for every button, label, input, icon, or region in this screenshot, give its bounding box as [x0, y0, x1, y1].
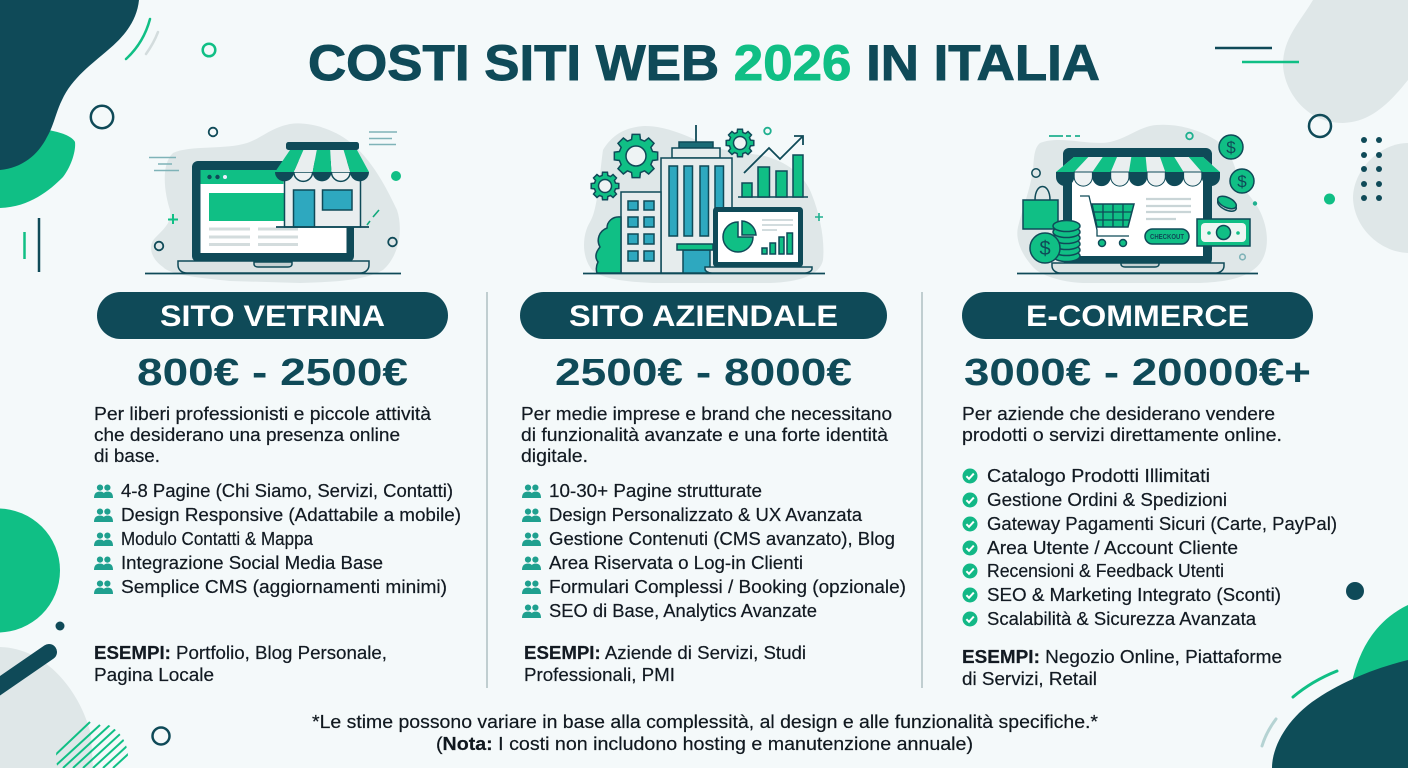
- price: 800€ - 2500€: [137, 352, 408, 394]
- illustration: office buildings and charts: [583, 125, 825, 283]
- examples: Professionali, PMI: [524, 665, 675, 685]
- examples: Pagina Locale: [94, 665, 214, 685]
- examples: [94, 643, 387, 685]
- heading pill: [962, 292, 1313, 339]
- feature list: Recensioni & Feedback Utenti: [987, 561, 1224, 581]
- illustration: online shop laptop: $: [1237, 172, 1247, 191]
- price: 3000€ - 20000€+: [964, 352, 1311, 394]
- description: di funzionalità avanzate e una forte identità: [521, 425, 889, 445]
- feature list: Gestione Contenuti (CMS avanzato), Blog: [549, 529, 895, 549]
- feature list: [962, 466, 1337, 629]
- feature list: SEO di Base, Analytics Avanzate: [549, 601, 817, 621]
- feature list: 10-30+ Pagine strutturate: [549, 481, 762, 501]
- feature list: Formulari Complessi / Booking (opzionale): [549, 577, 906, 597]
- description: [94, 404, 432, 466]
- feature list: Catalogo Prodotti Illimitati: [987, 466, 1210, 486]
- feature list: Modulo Contatti & Mappa: [121, 529, 314, 549]
- illustration: online shop laptop: $: [1226, 138, 1236, 157]
- heading pill: SITO VETRINA: [160, 300, 385, 333]
- panel: sito vetrina: [94, 123, 461, 685]
- examples: ESEMPI: Aziende di Servizi, Studi: [524, 643, 806, 663]
- feature list: Integrazione Social Media Base: [121, 553, 383, 573]
- heading pill: SITO AZIENDALE: [569, 300, 838, 333]
- illustration: online shop laptop: [1017, 125, 1267, 283]
- decoration: top-left shapes: [0, 0, 215, 272]
- illustration: laptop and shop: [145, 123, 401, 283]
- description: Per medie imprese e brand che necessitano: [521, 404, 892, 424]
- examples: ESEMPI: Portfolio, Blog Personale,: [94, 643, 387, 663]
- title: COSTI SITI WEB 2026 IN ITALIA: [308, 35, 1100, 91]
- description: Per liberi professionisti e piccole attività: [94, 404, 432, 424]
- feature list: SEO & Marketing Integrato (Sconti): [987, 585, 1281, 605]
- feature list: 4-8 Pagine (Chi Siamo, Servizi, Contatti): [121, 481, 453, 501]
- decoration: top-right shapes: [1215, 0, 1408, 253]
- heading pill: [97, 292, 448, 339]
- feature list: Area Riservata o Log-in Clienti: [549, 553, 803, 573]
- description: digitale.: [521, 446, 588, 466]
- panel: sito aziendale: [520, 125, 906, 685]
- feature list: Design Responsive (Adattabile a mobile): [121, 505, 461, 525]
- heading pill: E-COMMERCE: [1026, 300, 1249, 333]
- examples: [962, 647, 1282, 689]
- description: prodotti o servizi direttamente online.: [962, 425, 1282, 445]
- illustration: online shop laptop: $: [1039, 238, 1051, 260]
- feature list: [522, 481, 906, 621]
- examples: di Servizi, Retail: [962, 669, 1097, 689]
- description: [521, 404, 892, 466]
- feature list: [94, 481, 461, 597]
- examples: ESEMPI: Negozio Online, Piattaforme: [962, 647, 1282, 667]
- feature list: Gateway Pagamenti Sicuri (Carte, PayPal): [987, 514, 1337, 534]
- examples: [524, 643, 806, 685]
- decoration: bottom-right shapes: [1262, 582, 1408, 768]
- heading pill: [520, 292, 887, 339]
- feature list: Scalabilità & Sicurezza Avanzata: [987, 609, 1257, 629]
- footer note: (Nota: I costi non includono hosting e manutenzione annuale): [436, 733, 973, 754]
- description: [962, 404, 1282, 445]
- price: 2500€ - 8000€: [555, 352, 852, 394]
- divider: [486, 292, 488, 688]
- feature list: Semplice CMS (aggiornamenti minimi): [121, 577, 447, 597]
- description: che desiderano una presenza online: [94, 425, 400, 445]
- footer note: *Le stime possono variare in base alla complessità, al design e alle funzionalità specifiche.*: [312, 711, 1098, 732]
- illustration: online shop laptop: CHECKOUT: [1150, 234, 1185, 241]
- feature list: Design Personalizzato & UX Avanzata: [549, 505, 863, 525]
- feature list: Area Utente / Account Cliente: [987, 538, 1238, 558]
- footer note: [312, 711, 1098, 754]
- description: di base.: [94, 446, 160, 466]
- description: Per aziende che desiderano vendere: [962, 404, 1275, 424]
- divider: [921, 292, 923, 688]
- decoration: bottom-left shapes: [0, 508, 170, 768]
- panel: e-commerce: [962, 125, 1337, 689]
- feature list: Gestione Ordini & Spedizioni: [987, 490, 1227, 510]
